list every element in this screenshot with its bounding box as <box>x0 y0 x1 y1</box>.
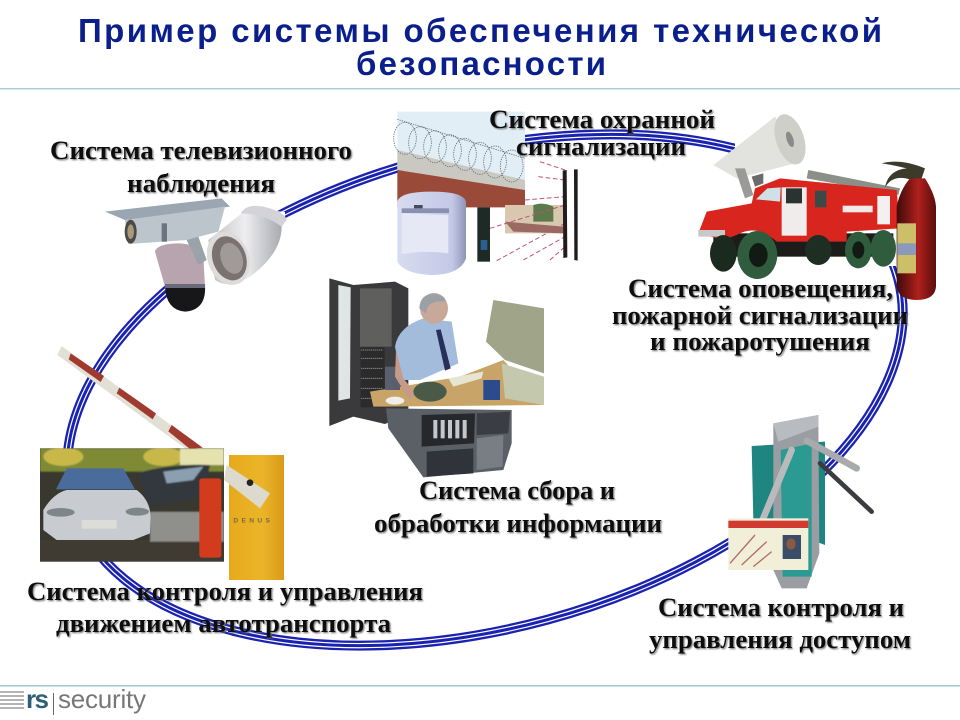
label: access control: управления доступом <box>649 625 911 654</box>
barrier arm <box>57 346 203 449</box>
icon: fire truck, siren and extinguisher <box>698 110 936 300</box>
label: video surveillance <box>50 136 352 198</box>
label: access control <box>649 593 911 654</box>
label: perimeter alarm: сигнализации <box>516 132 686 161</box>
top divider line <box>0 88 960 90</box>
icon: access turnstile and ID card <box>728 415 872 588</box>
turnstile post <box>773 415 819 588</box>
label: warning and fire systems <box>612 274 908 356</box>
icon: car barrier <box>40 346 284 580</box>
dome camera <box>155 243 205 312</box>
label: video surveillance: наблюдения <box>127 169 275 198</box>
loudspeaker siren <box>713 110 811 198</box>
label: warning and fire systems: и пожаротушения <box>650 327 870 356</box>
infrared beam barrier <box>477 162 578 262</box>
bullet camera <box>187 206 287 291</box>
fire extinguisher <box>882 162 936 300</box>
car photo <box>40 447 224 562</box>
footer logo: rs security <box>0 684 146 715</box>
label: warning and fire systems: Система оповещения, <box>628 274 893 303</box>
footer logo: rs security: security <box>58 684 146 714</box>
icon: perimeter alarm equipment <box>394 112 578 275</box>
logo dot pattern <box>0 691 24 709</box>
label: access control: Система контроля и <box>658 593 904 622</box>
footer logo: rs security: rs <box>26 684 49 714</box>
bottom divider line <box>0 685 960 686</box>
teal partition <box>752 442 825 545</box>
turnstile arms <box>758 441 872 530</box>
razor wire fence <box>394 112 525 207</box>
fire truck <box>698 170 900 279</box>
label: vehicle control <box>27 577 423 638</box>
server chassis <box>386 408 512 477</box>
motion detector <box>397 192 466 275</box>
title: безопасности <box>356 45 606 82</box>
barrier control box <box>224 455 284 580</box>
white backing behind camera picture <box>165 200 285 300</box>
white backing behind fire truck picture <box>735 136 960 266</box>
server rack <box>329 278 408 426</box>
operator and desk <box>370 293 544 407</box>
barrier control box: DENUS <box>233 517 271 524</box>
label: vehicle control: движением автотранспорта <box>56 609 391 638</box>
label: warning and fire systems: пожарной сигнализации <box>612 301 908 330</box>
box camera housing <box>105 198 230 244</box>
label: video surveillance: Система телевизионного <box>50 136 352 165</box>
ID card <box>728 518 808 570</box>
label: perimeter alarm: Система охранной <box>489 105 715 134</box>
icon: operator at data centre workstation <box>329 278 544 477</box>
label: data processing: Система сбора и <box>419 476 615 505</box>
icon: video surveillance cameras <box>105 198 287 312</box>
label: data processing <box>374 476 662 538</box>
title: Пример системы обеспечения технической <box>78 12 882 49</box>
label: perimeter alarm <box>489 105 715 161</box>
label: data processing: обработки информации <box>374 509 662 538</box>
label: vehicle control: Система контроля и управления <box>27 577 423 606</box>
title <box>78 12 882 82</box>
